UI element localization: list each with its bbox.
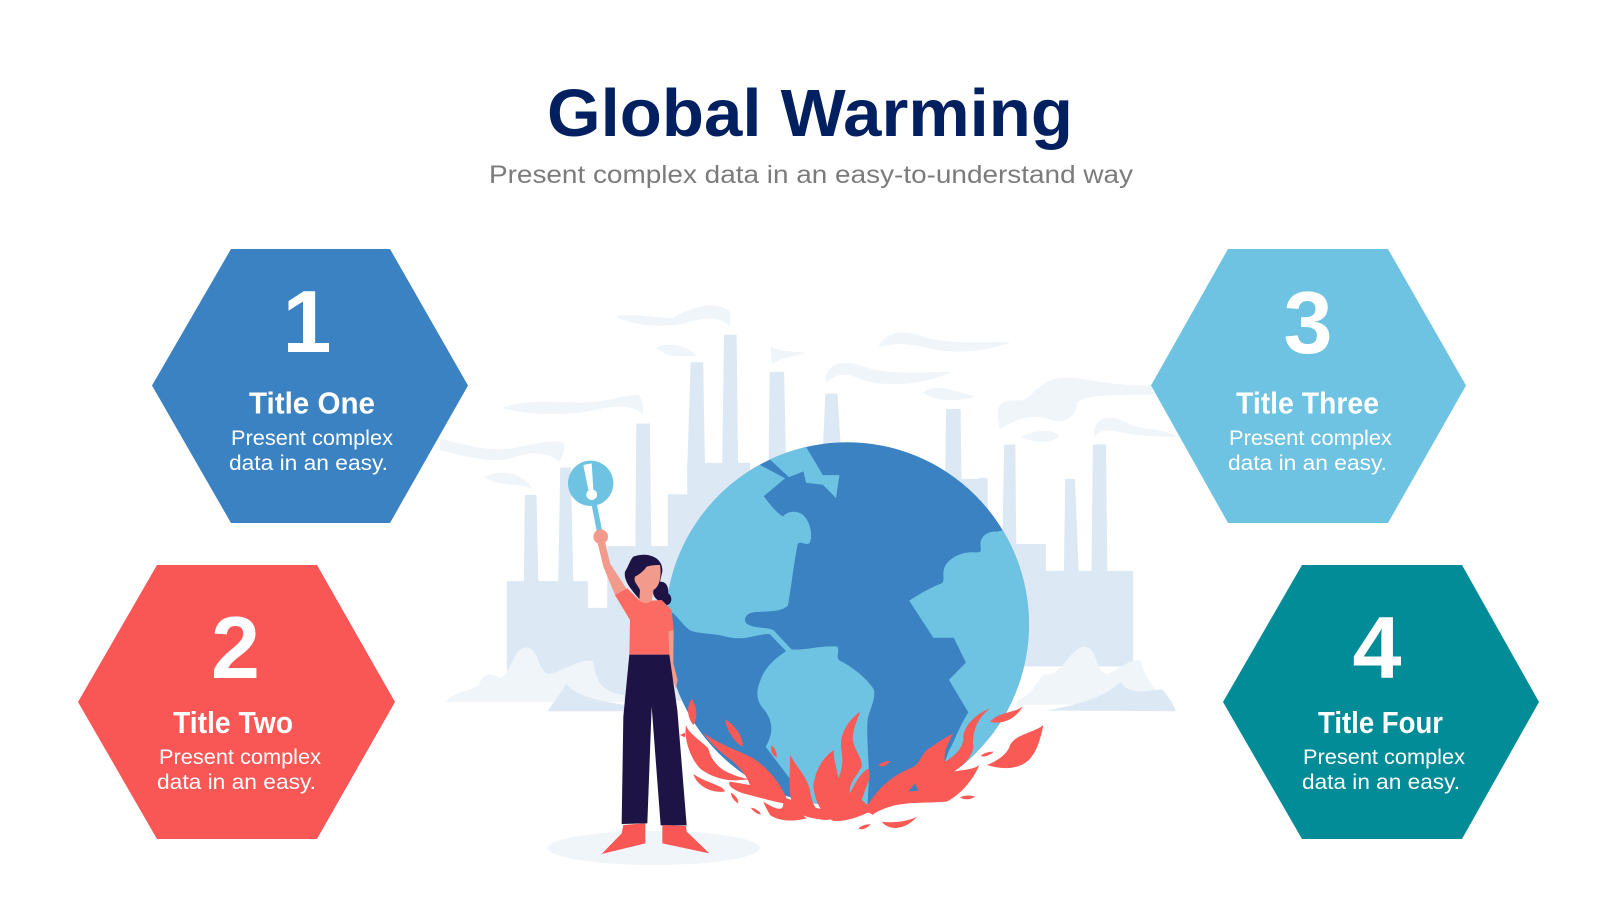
title: Global Warming xyxy=(547,76,1073,151)
globe xyxy=(666,442,1029,805)
description: Present complex xyxy=(1229,426,1392,450)
hair xyxy=(625,555,671,605)
continents xyxy=(666,447,1029,805)
number 2: 2 xyxy=(211,598,260,697)
factory skyline with smoke and clouds xyxy=(440,305,1177,711)
description: data in an easy. xyxy=(1228,451,1387,475)
flames xyxy=(680,698,1043,829)
illustration: factory, globe, flames and person xyxy=(440,305,1177,865)
number 3: 3 xyxy=(1284,273,1332,372)
heading: Title Four: Title Four xyxy=(1318,705,1443,740)
ground clouds xyxy=(446,647,1176,711)
number 4: 4 xyxy=(1353,598,1402,697)
description: data in an easy. xyxy=(229,451,388,475)
person holding warning sign xyxy=(568,461,709,854)
panel: hexagon 4 xyxy=(1223,565,1539,839)
description: Present complex xyxy=(231,426,393,450)
number 1: 1 xyxy=(283,272,331,371)
panel: hexagon 3 xyxy=(1151,249,1466,523)
arm and skin xyxy=(593,529,678,689)
smoke plumes xyxy=(440,305,1177,489)
description: data in an easy. xyxy=(157,770,316,794)
shoes xyxy=(602,823,645,854)
shirt xyxy=(615,588,674,655)
description: Present complex xyxy=(159,745,321,769)
heading: Title One: Title One xyxy=(249,386,375,420)
description: Present complex xyxy=(1303,745,1465,769)
panel: hexagon 2 xyxy=(78,565,395,839)
description: data in an easy. xyxy=(1302,770,1460,794)
panel: hexagon 1 xyxy=(152,249,468,523)
subtitle: Present complex data in an easy-to-understand way xyxy=(489,161,1134,189)
trousers xyxy=(622,655,687,825)
heading: Title Two: Title Two xyxy=(173,705,293,740)
warning sign xyxy=(568,461,613,565)
ground shadow xyxy=(548,831,760,865)
heading: Title Three: Title Three xyxy=(1236,386,1379,420)
chimneys and factory buildings xyxy=(507,335,1133,701)
